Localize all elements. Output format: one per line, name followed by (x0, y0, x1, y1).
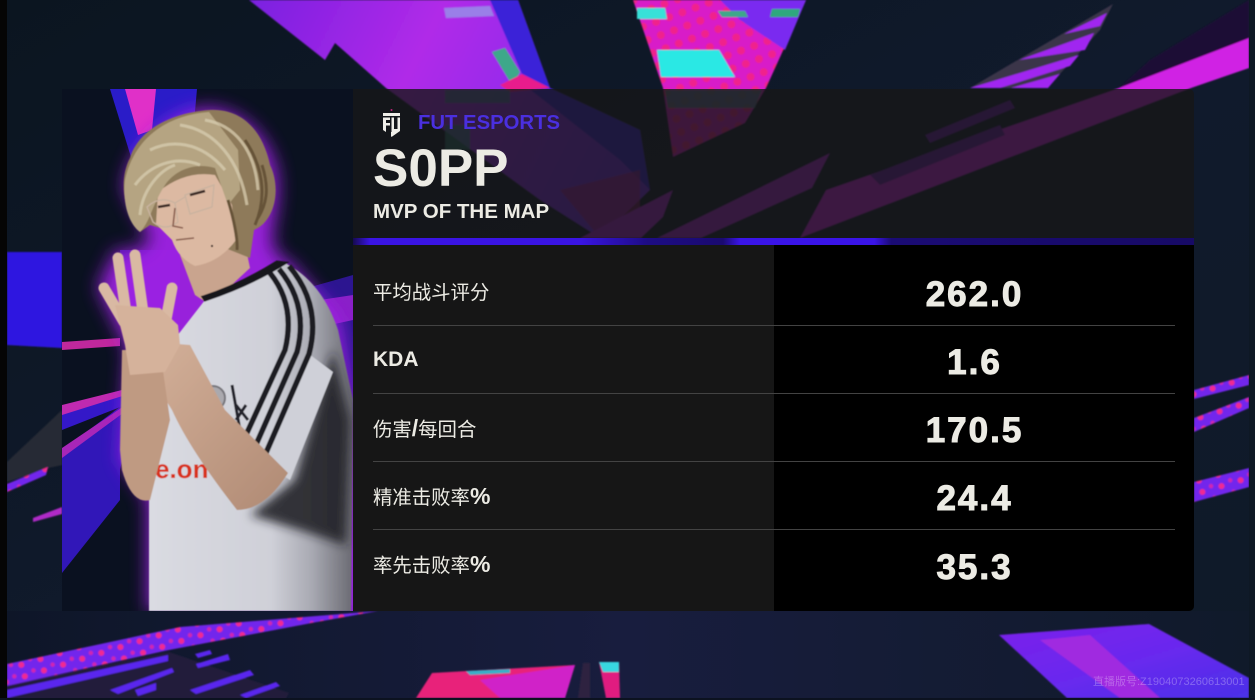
stat value: average combat score: 262.0 (926, 275, 1023, 314)
panel: header (353, 89, 1194, 238)
shirt dark side (250, 350, 350, 545)
photo purple glow (98, 108, 353, 611)
glasses (147, 185, 214, 227)
face (156, 174, 236, 266)
accent band (353, 238, 1194, 245)
top centre purple panel (249, 0, 650, 238)
player name: S0PP (373, 139, 509, 198)
hair back (124, 110, 276, 258)
shirt (149, 263, 353, 611)
top right striped shard (970, 4, 1113, 88)
team name: FUT ESPORTS (418, 112, 560, 134)
bottom right purple slab (999, 624, 1249, 698)
panel: stats table (353, 245, 1194, 611)
stat label: headshot rate: 精准击败率% (373, 483, 490, 509)
sleeve logo (232, 385, 248, 430)
stat value: headshot rate: 24.4 (936, 479, 1013, 518)
stat label: average combat score: 平均战斗评分 (373, 282, 489, 304)
sponsor text: e.on (155, 454, 208, 484)
eyes (158, 191, 205, 207)
stat value: KDA: 1.6 (947, 343, 1002, 382)
hair fringe (124, 112, 240, 232)
photo backdrop shapes (62, 89, 353, 611)
left pink strips (7, 467, 62, 522)
bottom centre pink screen (416, 662, 620, 698)
top centre pink screen (633, 0, 806, 157)
stat label: first kill rate: 率先击败率% (373, 551, 490, 577)
nose and mouth (173, 208, 194, 240)
team logo icon (383, 109, 400, 137)
neck (180, 220, 250, 305)
player figure (104, 110, 353, 611)
panel: player photo (62, 89, 353, 611)
top right pink band (800, 38, 1249, 238)
sleeve stripes (240, 266, 313, 462)
value column background (774, 245, 1194, 611)
bottom left dotted band (7, 611, 378, 700)
left blue block (7, 252, 62, 348)
subtitle: MVP OF THE MAP (373, 200, 549, 223)
left grey shard (7, 410, 62, 482)
stat label: damage per round: 伤害/每回合 (373, 415, 476, 441)
right forearm (128, 340, 288, 510)
sleeve (262, 354, 333, 480)
stat label: KDA: KDA (373, 348, 418, 371)
watermark: 直播版号:Z1904073260613001 (1093, 676, 1245, 688)
left forearm (120, 350, 170, 501)
hand (104, 255, 180, 375)
crest (201, 386, 225, 410)
stat value: first kill rate: 35.3 (936, 548, 1013, 587)
right dotted strips (1194, 375, 1249, 502)
stat value: damage per round: 170.5 (926, 411, 1023, 450)
hair strands (135, 120, 258, 215)
